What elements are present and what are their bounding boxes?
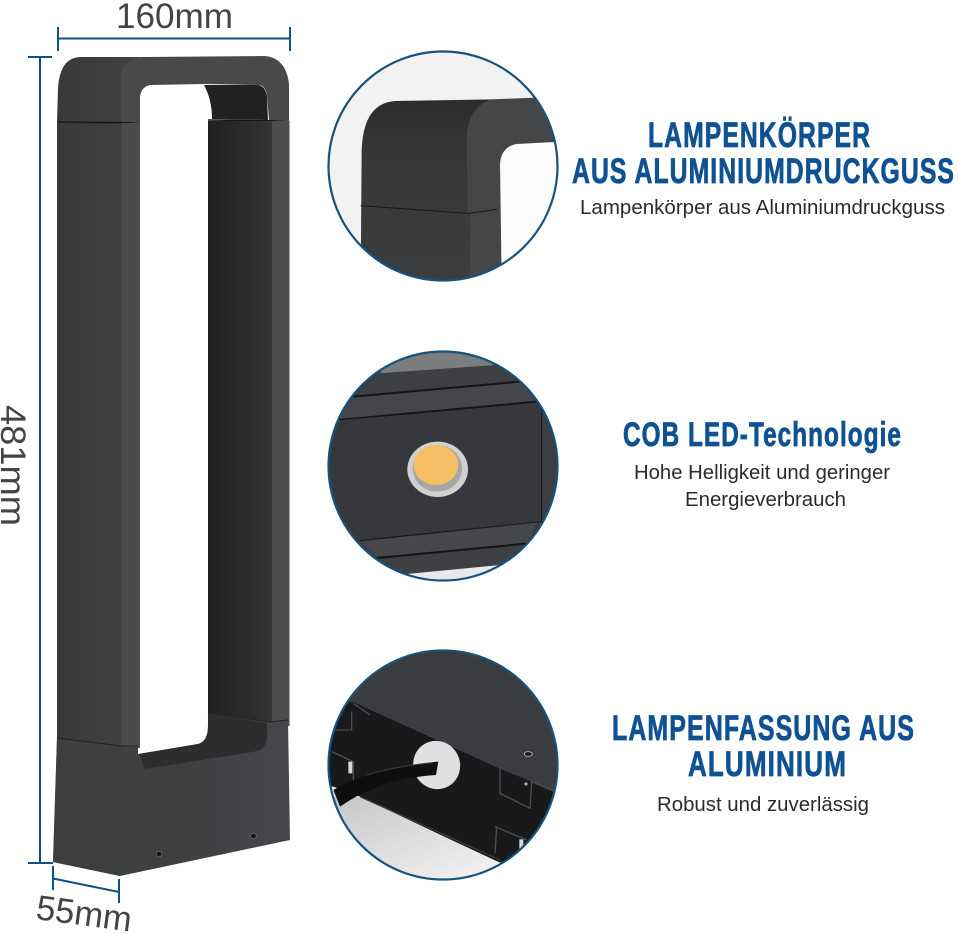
heading: Aluminium: ALUMINIUM <box>688 745 847 784</box>
lamp base left face <box>53 738 122 876</box>
description: LED <box>634 461 890 511</box>
description: LED: Hohe Helligkeit und geringer <box>634 461 890 484</box>
lamp left side face <box>57 57 140 750</box>
dimension: width 160mm <box>58 0 290 51</box>
base seams <box>57 713 288 746</box>
detail circle: COB LED <box>328 340 563 587</box>
detail circle: aluminium body corner <box>328 52 560 280</box>
lamp front frame top <box>121 56 289 122</box>
dimension: height 481mm <box>0 57 53 863</box>
description: base: Robust und zuverlässig <box>657 793 869 816</box>
lamp left column front <box>121 123 140 748</box>
lamp right column inner face <box>208 121 272 726</box>
lamp inner dark surface top <box>204 85 268 120</box>
dimension: depth 55mm <box>34 866 134 934</box>
lamp base <box>53 713 290 876</box>
description: body: Lampenkörper aus Aluminiumdruckguss <box>580 196 945 219</box>
heading: Lampenkörper: LAMPENKÖRPER <box>648 116 871 155</box>
description: LED: Energieverbrauch <box>685 488 846 511</box>
lamp right column front <box>272 121 290 726</box>
screws <box>156 851 162 857</box>
lamp product photo <box>53 56 290 876</box>
lamp base inner floor <box>139 713 267 769</box>
detail circle: aluminium base <box>327 649 559 881</box>
seam <box>58 120 289 123</box>
